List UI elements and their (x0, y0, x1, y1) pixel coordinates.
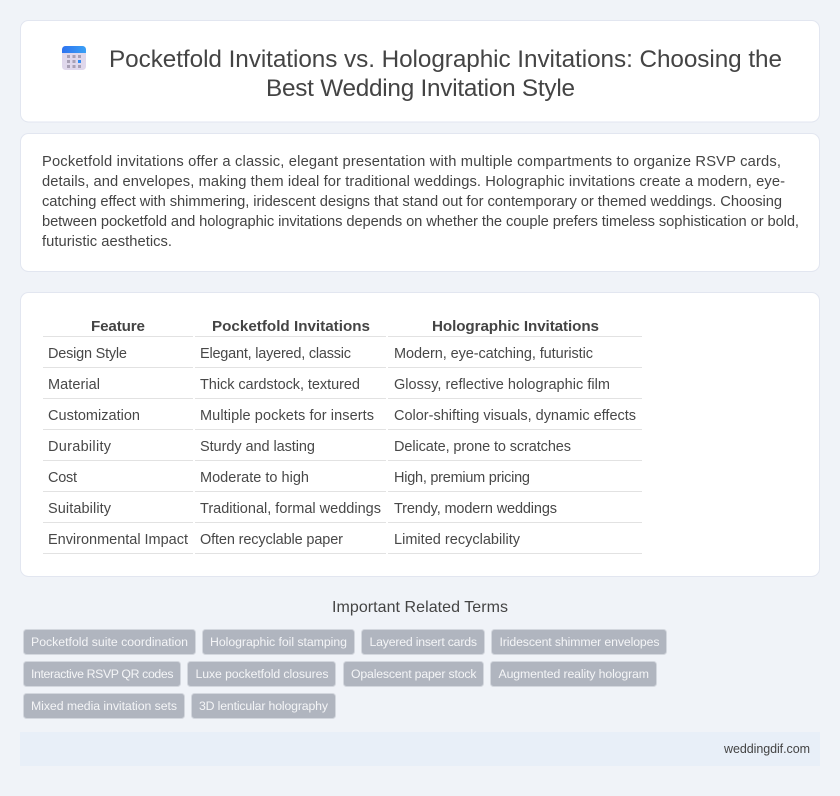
row: durability: Delicate, prone to scratches (394, 439, 571, 455)
table header: Pocketfold Invitations (212, 318, 370, 335)
row: design style: Design Style (48, 346, 127, 362)
table header: Feature (91, 318, 145, 335)
tag (202, 630, 354, 654)
tag (362, 630, 484, 654)
row: material: Thick cardstock, textured (200, 377, 360, 393)
row: cost: High, premium pricing (394, 470, 530, 486)
row: cost (48, 470, 530, 486)
title text: Pocketfold Invitations vs. Holographic Invitations: Choosing the (109, 46, 782, 73)
row: design style (48, 346, 593, 362)
row: cost: Cost (48, 470, 77, 486)
row: customization: Color-shifting visuals, dynamic effects (394, 408, 636, 424)
panel: title header (20, 20, 820, 122)
footer: weddingdif.com (723, 742, 810, 756)
tag (24, 630, 196, 654)
tag (188, 662, 336, 686)
tag: Pocketfold suite coordination (31, 635, 188, 649)
row: material: Glossy, reflective holographic film (394, 377, 610, 393)
tag (192, 694, 336, 718)
row: suitability: Suitability (48, 501, 112, 517)
intro paragraph: Pocketfold invitations offer a classic, elegant presentation with multiple compartments to organize RSVP cards, (42, 154, 781, 170)
row: customization: Multiple pockets for inserts (200, 408, 374, 424)
row: customization: Customization (48, 408, 140, 424)
intro paragraph: details, and envelopes, making them ideal for traditional weddings. Holographic invitations create a modern, eye- (42, 174, 785, 190)
intro paragraph: futuristic aesthetics. (42, 234, 172, 250)
row: durability: Sturdy and lasting (200, 439, 315, 455)
table header: Holographic Invitations (432, 318, 599, 335)
row: material (48, 377, 610, 393)
tag: Opalescent paper stock (351, 667, 477, 681)
tag: Layered insert cards (370, 635, 477, 649)
title text: Best Wedding Invitation Style (266, 75, 575, 102)
panel: comparison table (20, 292, 820, 576)
tag: Mixed media invitation sets (31, 699, 177, 713)
tag: Holographic foil stamping (210, 635, 347, 649)
tag (344, 662, 484, 686)
tag: Luxe pocketfold closures (196, 667, 328, 681)
footer (20, 732, 820, 766)
tag: Interactive RSVP QR codes (31, 667, 174, 681)
tag (490, 662, 656, 686)
row: material: Material (48, 377, 100, 393)
panel: introduction (20, 134, 820, 272)
row: suitability: Traditional, formal weddings (200, 501, 381, 517)
row: design style: Modern, eye-catching, futuristic (394, 346, 593, 362)
row: suitability (48, 501, 557, 517)
row: cost: Moderate to high (200, 470, 309, 486)
tag: Augmented reality hologram (498, 667, 649, 681)
row: environmental impact (48, 532, 521, 548)
table header (91, 318, 599, 335)
row: environmental impact: Often recyclable paper (200, 532, 343, 548)
row: customization (48, 408, 636, 424)
tag: 3D lenticular holography (199, 699, 329, 713)
intro paragraph: catching effect with shimmering, iridescent designs that stand out for contemporary or themed weddings. Choosing (42, 194, 782, 210)
row: durability: Durability (48, 439, 112, 455)
tag (24, 662, 180, 686)
tag (24, 694, 184, 718)
row: durability (48, 439, 571, 455)
row: suitability: Trendy, modern weddings (394, 501, 557, 517)
intro paragraph: between pocketfold and holographic invitations depends on whether the couple prefers timeless sophistication or bold, (42, 214, 799, 230)
icon: calendar (62, 46, 86, 70)
row: design style: Elegant, layered, classic (200, 346, 351, 362)
related term tags (24, 630, 666, 718)
tag (492, 630, 666, 654)
tag: Iridescent shimmer envelopes (500, 635, 660, 649)
row: environmental impact: Limited recyclability (394, 532, 521, 548)
row: environmental impact: Environmental Impact (48, 532, 188, 548)
heading: important related terms: Important Related Terms (332, 599, 508, 616)
